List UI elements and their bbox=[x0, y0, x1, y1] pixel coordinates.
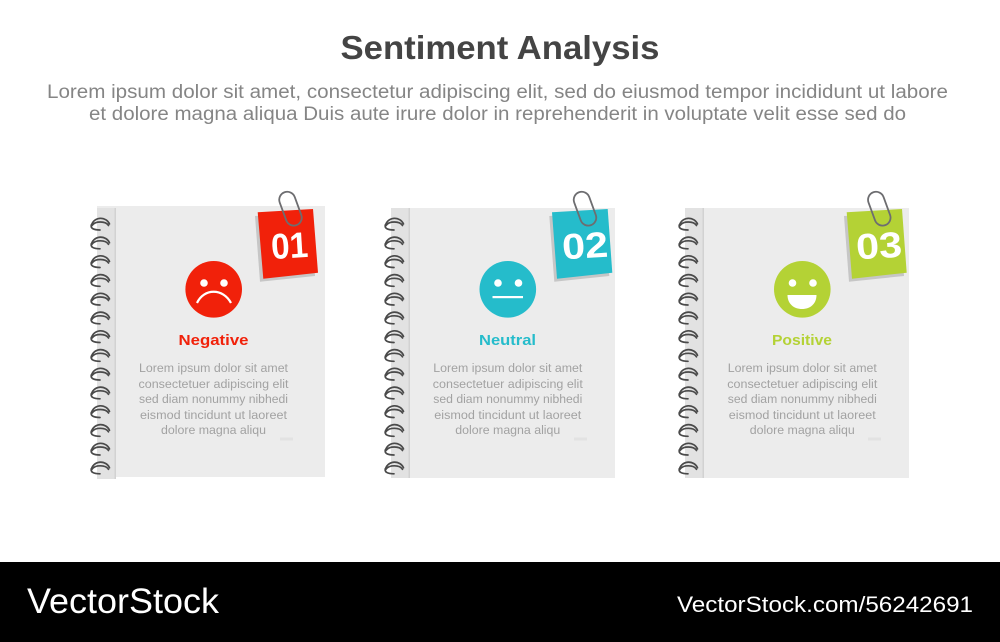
label: Neutral bbox=[479, 332, 536, 349]
body text: sed diam nonummy nibhedi bbox=[433, 392, 582, 406]
body text: eismod tincidunt ut laoreet bbox=[729, 408, 876, 422]
body text: eismod tincidunt ut laoreet bbox=[140, 408, 288, 422]
subtitle text bbox=[47, 82, 948, 125]
icon: neutral face bbox=[480, 261, 536, 318]
subtitle text: Lorem ipsum dolor sit amet, consectetur adipiscing elit, sed do eiusmod tempor incididunt ut labore bbox=[47, 82, 948, 103]
label: Positive bbox=[772, 332, 832, 349]
body text bbox=[433, 361, 583, 437]
body text: sed diam nonummy nibhedi bbox=[139, 392, 288, 406]
sticky note bbox=[552, 209, 612, 279]
sticky note shadow bbox=[255, 212, 315, 282]
sticky note bbox=[847, 209, 907, 279]
footer image id: VectorStock.com/56242691 bbox=[677, 592, 973, 617]
label: Negative bbox=[178, 332, 248, 349]
panel: neutral bbox=[385, 190, 615, 478]
body text: consectetuer adipiscing elit bbox=[433, 377, 583, 391]
icon: happy face bbox=[774, 261, 831, 318]
subtitle text: et dolore magna aliqua Duis aute irure dolor in reprehenderit in voluptate velit esse sed do bbox=[89, 104, 906, 125]
title: Sentiment Analysis bbox=[340, 29, 660, 66]
notebook binding bbox=[97, 208, 116, 479]
notebook page bbox=[685, 208, 909, 478]
body text: consectetuer adipiscing elit bbox=[727, 377, 878, 391]
body text: eismod tincidunt ut laoreet bbox=[434, 408, 582, 422]
body text: dolore magna aliqu bbox=[455, 423, 560, 437]
number: 03 bbox=[855, 224, 903, 267]
footer logo: VectorStock bbox=[27, 582, 220, 621]
spiral rings bbox=[679, 218, 698, 474]
number: 02 bbox=[561, 224, 609, 267]
icon: paper clip bbox=[571, 190, 599, 228]
small tab mark bbox=[280, 438, 293, 440]
body text bbox=[727, 361, 878, 437]
notebook binding bbox=[391, 208, 410, 478]
notebook page bbox=[391, 208, 615, 478]
body text: dolore magna aliqu bbox=[161, 423, 266, 437]
footer bar bbox=[0, 562, 1000, 642]
sticky note shadow bbox=[844, 212, 904, 282]
body text: Lorem ipsum dolor sit amet bbox=[139, 361, 289, 375]
icon: paper clip bbox=[277, 190, 304, 228]
small tab mark bbox=[868, 438, 881, 440]
small tab mark bbox=[574, 438, 587, 440]
icon: sad face bbox=[185, 261, 242, 318]
sticky note shadow bbox=[549, 212, 609, 282]
body text bbox=[138, 361, 289, 437]
notebook page bbox=[97, 206, 325, 477]
panel: positive bbox=[679, 190, 909, 478]
spiral rings bbox=[91, 218, 110, 474]
body text: dolore magna aliqu bbox=[750, 423, 855, 437]
notebook binding bbox=[685, 208, 704, 478]
number: 01 bbox=[270, 224, 309, 267]
body text: sed diam nonummy nibhedi bbox=[728, 392, 877, 406]
body text: Lorem ipsum dolor sit amet bbox=[433, 361, 583, 375]
body text: Lorem ipsum dolor sit amet bbox=[728, 361, 877, 375]
icon: paper clip bbox=[866, 190, 893, 228]
body text: consectetuer adipiscing elit bbox=[138, 377, 289, 391]
spiral rings bbox=[385, 218, 404, 474]
sticky note bbox=[258, 209, 318, 279]
panel: negative bbox=[91, 190, 325, 479]
